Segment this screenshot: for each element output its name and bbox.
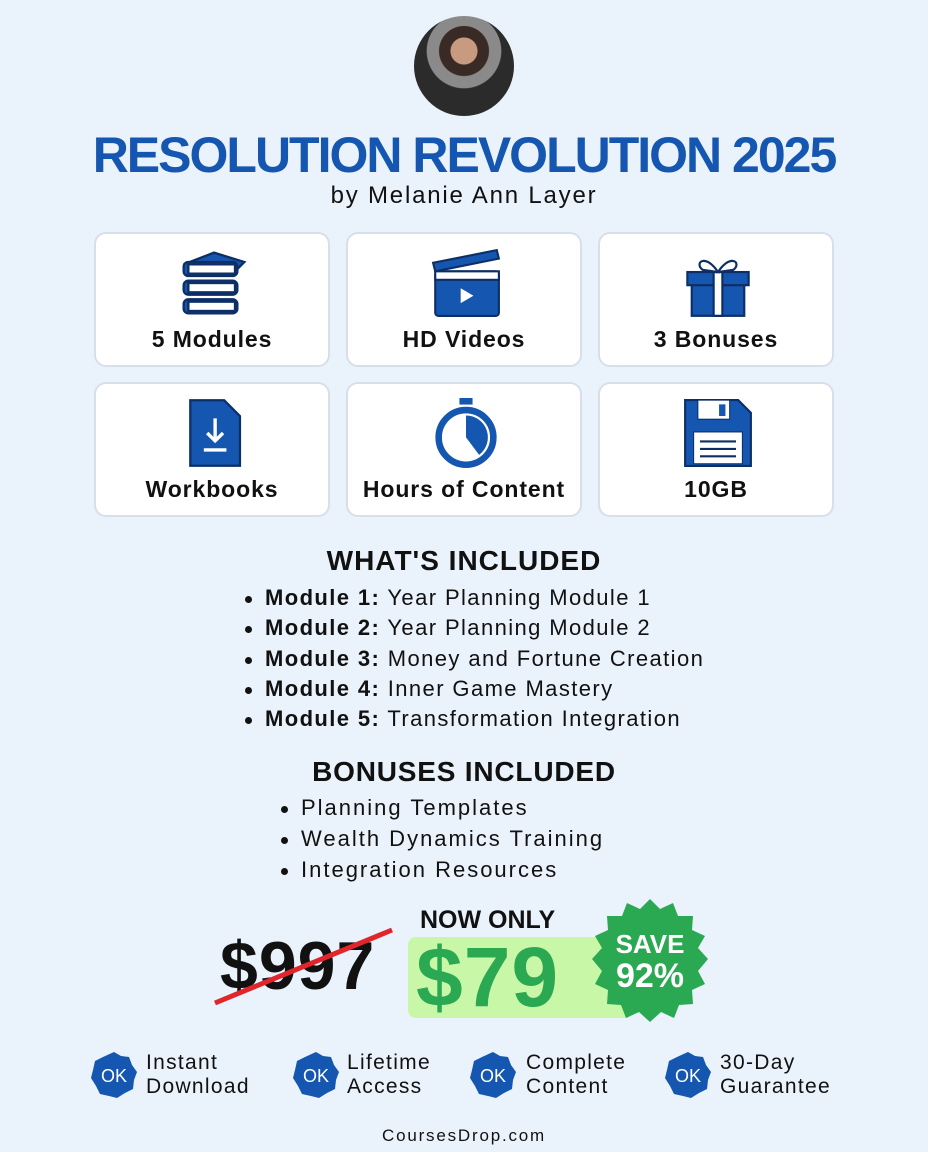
list: bonuses: Planning Templates [301, 795, 529, 820]
guarantee row: Download [146, 1075, 250, 1098]
guarantee row: Content [526, 1075, 609, 1098]
new price box: $79 [416, 930, 559, 1024]
guarantee row: Lifetime [347, 1051, 431, 1074]
badge: save 92%: SAVE [616, 929, 684, 959]
card: Hours of Content [346, 382, 582, 517]
guarantee row: Access [347, 1075, 422, 1098]
footer: CoursesDrop.com [382, 1126, 546, 1145]
card: HD Videos [346, 232, 582, 367]
card: 5 Modules [94, 232, 330, 367]
badge: save 92% [592, 899, 708, 1022]
list: bonuses: Integration Resources [301, 857, 558, 882]
card: Workbooks [94, 382, 330, 517]
list: modules: Module 4: Inner Game Mastery [265, 676, 614, 701]
icon: stopwatch [435, 398, 497, 468]
card: 3 Bonuses [598, 232, 834, 367]
list: modules: Module 1: Year Planning Module 1 [265, 585, 651, 610]
guarantee row: OK [303, 1066, 329, 1086]
guarantee row [91, 1051, 831, 1098]
guarantee row: 30-Day [720, 1051, 796, 1074]
list: bonuses [281, 795, 604, 882]
card: 10GB [598, 382, 834, 517]
card: Hours of Content: Hours of Content [363, 476, 565, 502]
list: modules: Module 5: Transformation Integration [265, 706, 681, 731]
icon: clapperboard [432, 248, 500, 317]
card: 10GB: 10GB [684, 476, 748, 502]
card: 3 Bonuses: 3 Bonuses [654, 326, 778, 352]
guarantee row: OK [101, 1066, 127, 1086]
old price: $997 [220, 928, 375, 1004]
avatar [414, 16, 514, 116]
icon: document [189, 399, 242, 467]
guarantee row: OK [480, 1066, 506, 1086]
guarantee row: Guarantee [720, 1075, 831, 1098]
guarantee row: Complete [526, 1051, 626, 1074]
card: HD Videos: HD Videos [403, 326, 525, 352]
subtitle: by Melanie Ann Layer [331, 182, 597, 209]
list: modules [245, 585, 704, 731]
card: 5 Modules: 5 Modules [152, 326, 272, 352]
list: bonuses: Wealth Dynamics Training [301, 826, 604, 851]
heading: bonuses included: BONUSES INCLUDED [312, 756, 616, 787]
new price box [408, 937, 633, 1018]
guarantee row: OK [675, 1066, 701, 1086]
list: modules: Module 3: Money and Fortune Creation [265, 646, 704, 671]
list: modules: Module 2: Year Planning Module 2 [265, 615, 651, 640]
now only label: NOW ONLY [420, 906, 555, 934]
badge: save 92%: 92% [616, 957, 684, 995]
icon: floppy disk [684, 399, 752, 467]
heading: what's included: WHAT'S INCLUDED [327, 545, 601, 576]
title: RESOLUTION REVOLUTION 2025 [93, 127, 835, 183]
guarantee row: Instant [146, 1051, 218, 1074]
card: Workbooks: Workbooks [146, 476, 278, 502]
icon: books [182, 251, 246, 314]
icon: gift [686, 260, 750, 317]
